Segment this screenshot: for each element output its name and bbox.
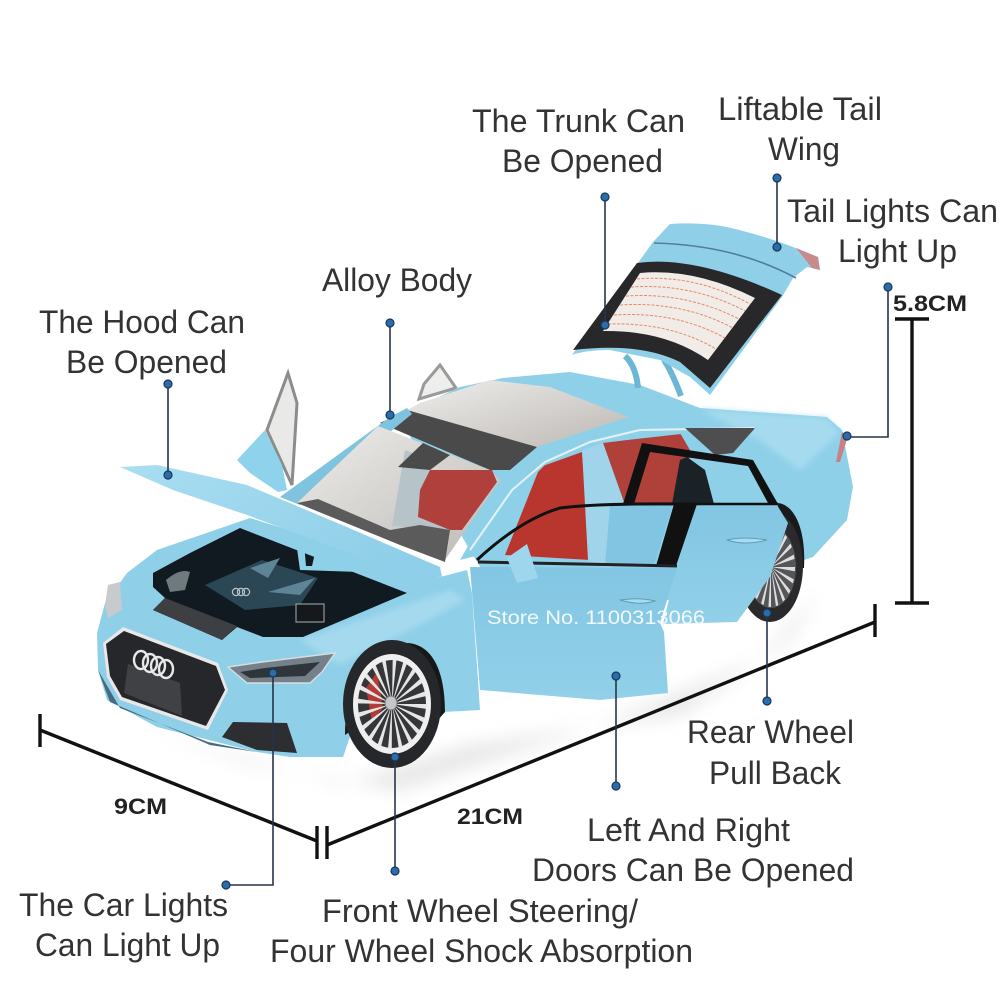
chrome window line (470, 428, 755, 550)
dimension: height 5.8CM (893, 291, 967, 603)
number plate (124, 664, 182, 716)
front door window arch (477, 504, 693, 560)
side interior pillar and rear panel (582, 443, 625, 570)
callout: trunk (472, 103, 685, 329)
brake caliper (366, 672, 383, 722)
left headlamp (105, 582, 122, 618)
callout: rear wheel: Rear Wheel (687, 714, 854, 750)
callout: rear wheel (687, 609, 854, 791)
engine highlights (250, 558, 315, 595)
rear wheel arch (770, 503, 804, 570)
rear seat shadow (672, 457, 714, 504)
callout: tail lights (787, 193, 998, 440)
callout: doors: Left And Right (587, 812, 790, 848)
car model illustration (97, 223, 853, 790)
grille mesh (106, 631, 225, 726)
open hood (120, 465, 442, 577)
callout: rear wheel: Pull Back (709, 755, 842, 791)
lower air intake (222, 722, 297, 753)
rear door (605, 443, 788, 624)
engine cover (205, 560, 318, 610)
rear door sill line (623, 503, 778, 505)
headlight inner (240, 662, 320, 678)
rear door black pillar (656, 504, 697, 566)
watermark store number: Store No. 1100313066 (487, 608, 705, 629)
sunroof dark edge (380, 410, 537, 470)
rim interior (358, 660, 426, 748)
defroster lines (608, 278, 750, 349)
radiator cover (153, 598, 237, 640)
front tire (343, 640, 441, 768)
wing red edge (796, 248, 820, 270)
front wheel (343, 640, 445, 768)
front spokes (374, 681, 410, 727)
callout: front wheel: Front Wheel Steering/ (322, 893, 638, 929)
rear side window interior (603, 433, 690, 505)
lower lip (98, 670, 257, 752)
rear shoulder highlight (700, 409, 840, 470)
side mirror (507, 544, 538, 583)
rear door handle (727, 538, 767, 543)
callout: car lights: Can Light Up (35, 927, 220, 963)
roof and rear body (400, 372, 853, 600)
dimension: width 9CM: 9CM (114, 794, 167, 819)
callout: tail wing (718, 91, 882, 251)
front door (470, 504, 693, 700)
door window frame (267, 373, 297, 485)
callout: doors (532, 672, 854, 888)
rear trunk lid (572, 223, 820, 396)
red interior seats (505, 452, 590, 560)
rear door panel (663, 503, 788, 624)
callout: tail wing: Wing (768, 131, 840, 167)
rear wheel (737, 503, 804, 622)
front seat through windshield (418, 470, 497, 530)
hub (385, 696, 397, 710)
callout: car lights: The Car Lights (19, 887, 228, 923)
dashboard (297, 499, 450, 562)
callout: tail lights: Light Up (838, 233, 957, 269)
callout: tail wing: Liftable Tail (718, 91, 882, 127)
engine bay (153, 520, 407, 640)
windshield A-pillar (280, 408, 412, 505)
rear window frame (573, 262, 782, 388)
sunroof glass (407, 380, 628, 447)
callout: alloy body: Alloy Body (322, 262, 472, 298)
rear rim (746, 526, 796, 608)
callout: front wheel (270, 753, 693, 969)
quarter window (685, 428, 755, 455)
far side open door (419, 365, 456, 399)
front door handle (620, 599, 655, 603)
callout: car lights (19, 669, 277, 963)
dimension: width 9CM (40, 714, 317, 859)
wing seam (654, 243, 796, 278)
door panel (237, 430, 287, 492)
rear spokes (758, 545, 784, 589)
tail light side strip (836, 432, 848, 462)
open left door (237, 373, 297, 492)
engine logo (232, 588, 250, 596)
callout: tail lights: Tail Lights Can (787, 193, 998, 229)
rear-view mirror visor (398, 443, 450, 470)
windshield glass (297, 426, 500, 560)
trunk hinges (625, 356, 681, 396)
dimension: length 21CM (327, 604, 875, 859)
dimension: length 21CM: 21CM (457, 804, 523, 829)
callout: hood: The Hood Can (39, 304, 245, 340)
four rings logo (134, 651, 173, 678)
rear door window frame (623, 443, 778, 504)
dimension: height 5.8CM: 5.8CM (893, 291, 967, 316)
fuse block (296, 604, 324, 622)
roof side rail (460, 426, 757, 560)
callout: trunk: The Trunk Can (472, 103, 685, 139)
callout: hood: Be Opened (66, 344, 227, 380)
engine bay cavity (153, 528, 407, 640)
front door glass lower frame (478, 562, 677, 566)
grille chrome frame (103, 627, 228, 730)
headlight (228, 653, 335, 683)
bay sensors (166, 571, 190, 592)
ground shadow (150, 590, 820, 790)
callout: doors: Doors Can Be Opened (532, 852, 854, 888)
callout: trunk: Be Opened (502, 143, 663, 179)
callout: front wheel: Four Wheel Shock Absorption (270, 933, 693, 969)
fender highlight (300, 590, 465, 665)
trunk lid panel (572, 223, 820, 395)
rear door glass blue panel (605, 505, 673, 565)
front rim (353, 654, 431, 754)
wheel arch (345, 643, 445, 740)
cabin interior grey-blue (392, 450, 450, 530)
callout: hood (39, 304, 245, 479)
callout: alloy body (322, 262, 472, 419)
hood struts (293, 520, 368, 572)
front grille and lights (98, 582, 335, 753)
front door panel (470, 567, 677, 700)
rear window glass (603, 272, 755, 360)
front body (97, 518, 480, 757)
rear tire (737, 510, 803, 622)
